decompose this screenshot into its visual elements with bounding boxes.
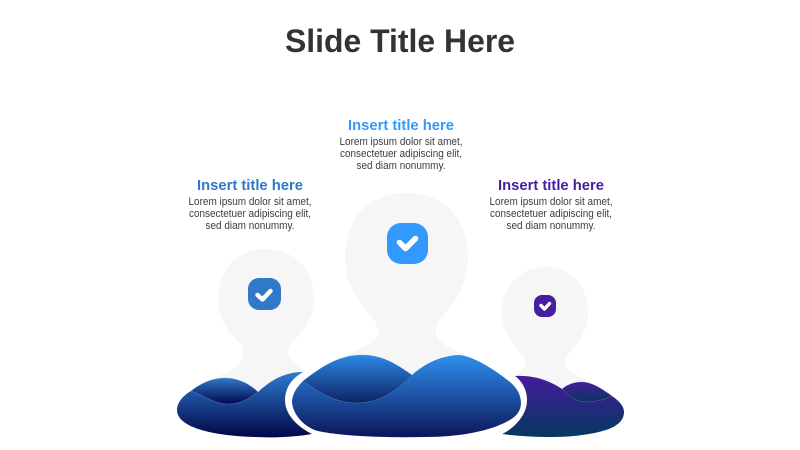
right person text: Lorem ipsum dolor sit amet, [490,196,613,208]
center person text: Lorem ipsum dolor sit amet, [340,136,463,148]
title: Slide Title Here [285,23,515,59]
icon: left check badge [248,278,281,310]
center person heading: Insert title here [348,118,454,134]
right person inner wave [562,382,612,402]
left person body [177,372,312,437]
left person text [188,196,312,232]
panel: right person [490,178,624,437]
left person text: consectetuer adipiscing elit, [189,208,311,220]
left person inner wave [191,378,258,404]
right person body [502,376,624,437]
icon: center check badge [387,223,428,264]
left person text: Lorem ipsum dolor sit amet, [188,196,312,208]
icon: right check badge [534,295,556,317]
panel: left person [177,178,314,437]
center person text: consectetuer adipiscing elit, [340,148,462,160]
center person inner wave [303,355,412,403]
panel: center person [292,118,521,437]
right person head silhouette [502,267,592,395]
center person head silhouette [345,193,468,390]
center person text: sed diam nonummy. [356,160,446,172]
right person text: consectetuer adipiscing elit, [490,208,612,220]
right person text: sed diam nonummy. [506,220,596,232]
right person heading: Insert title here [498,178,604,194]
left person heading: Insert title here [197,178,303,194]
right person text [490,196,613,232]
center person body [292,355,521,437]
center person text [340,136,463,172]
left person text: sed diam nonummy. [206,220,294,232]
left person head silhouette [205,249,314,400]
